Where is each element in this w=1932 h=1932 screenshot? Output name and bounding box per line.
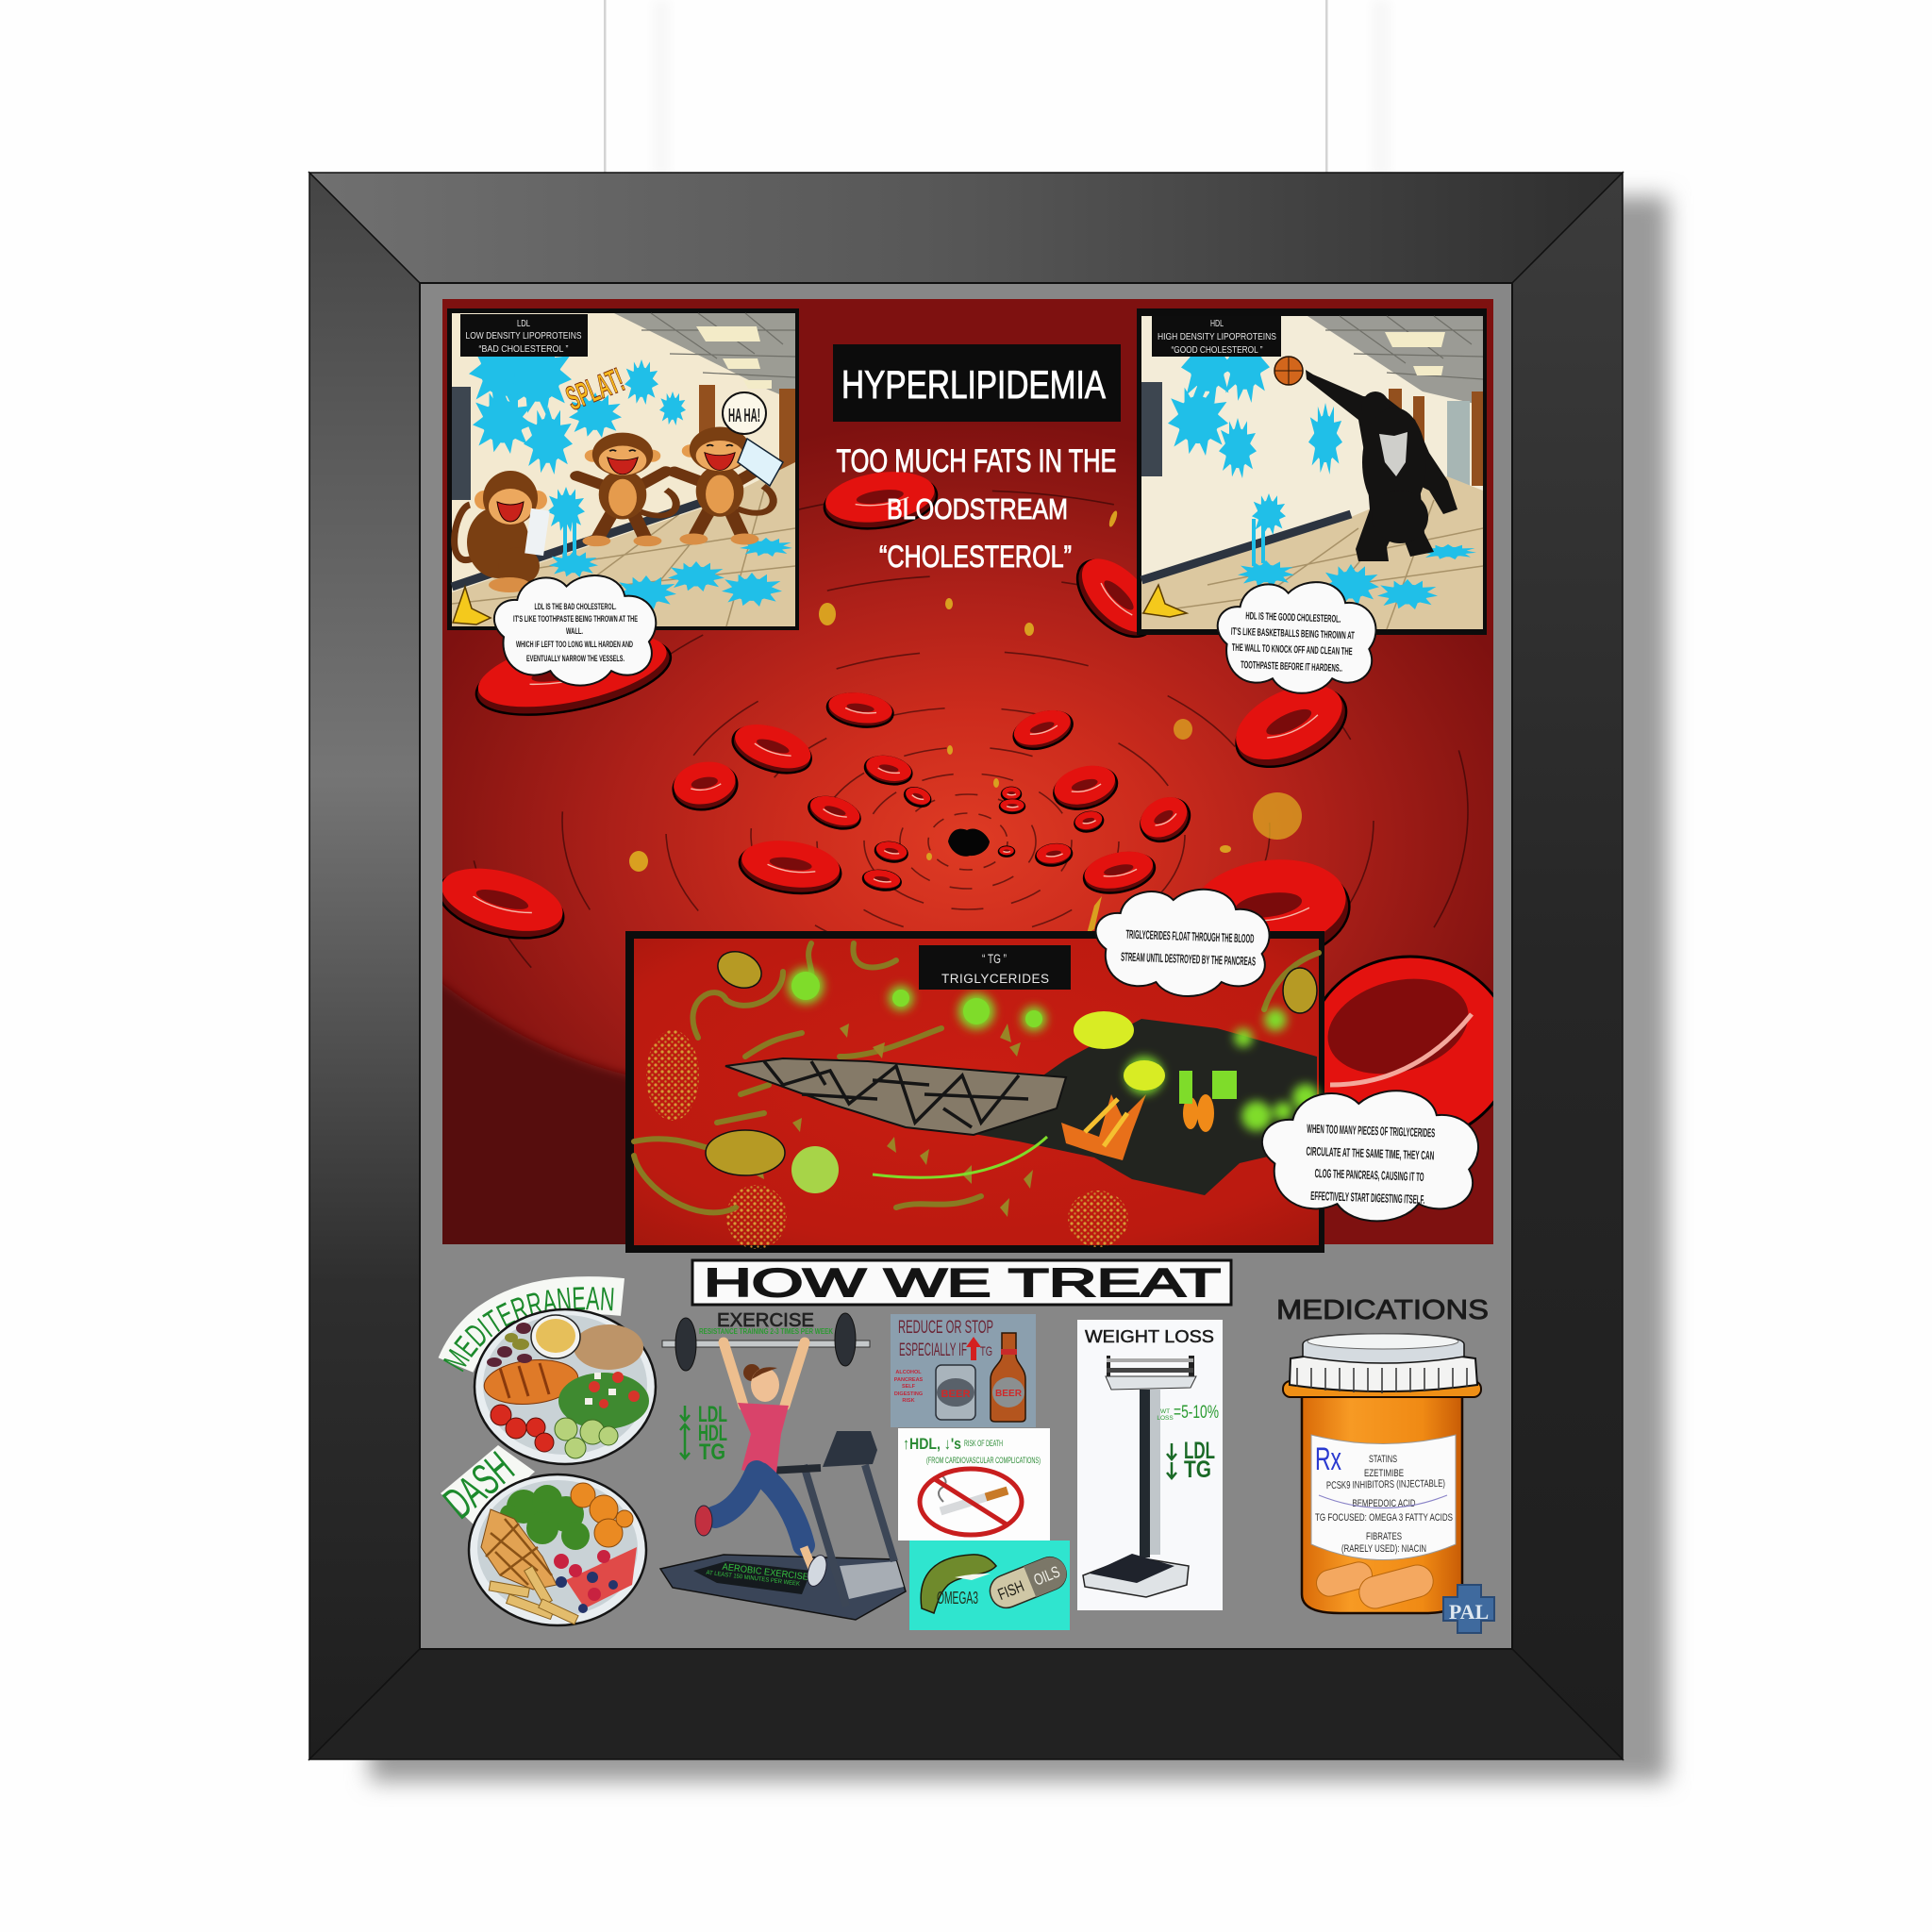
berries and watermelon xyxy=(554,1547,637,1613)
monkey laughing right xyxy=(675,426,774,544)
panel: stop smoking xyxy=(898,1428,1050,1541)
subtitle: BLOODSTREAM xyxy=(887,492,1068,525)
callout: triglycerides float: STREAM UNTIL DESTROYED BY THE PANCREAS xyxy=(1121,950,1256,968)
hallway wall xyxy=(452,313,795,626)
hallway ceiling xyxy=(614,313,795,401)
fish oil capsule: FISH xyxy=(995,1577,1026,1604)
callout: pancreas clog: CIRCULATE AT THE SAME TIME, THEY CAN xyxy=(1306,1144,1435,1162)
LDL TG effect: TG xyxy=(1184,1457,1211,1483)
label: HDL: “GOOD CHOLESTEROL ” xyxy=(1172,344,1263,356)
pill bottle xyxy=(1283,1334,1481,1613)
callout: pancreas clog: CLOG THE PANCREAS, CAUSING IT TO xyxy=(1314,1166,1424,1184)
label: triglycerides xyxy=(919,945,1071,990)
picture frame xyxy=(309,173,1623,1759)
panel: weight loss: WT xyxy=(1160,1408,1170,1415)
banner xyxy=(456,1295,623,1365)
callout: HDL explanation: HDL IS THE GOOD CHOLESTEROL. xyxy=(1245,610,1341,625)
monkey laughing middle xyxy=(577,433,676,546)
panel: weight loss xyxy=(1077,1320,1223,1610)
panel: omega 3 xyxy=(909,1541,1072,1630)
salmon xyxy=(482,1356,580,1408)
floating debris xyxy=(755,1024,1033,1217)
SPLAT sound effect: SPLAT! xyxy=(560,360,629,418)
fish oil capsule: OILS xyxy=(1031,1563,1062,1590)
title box xyxy=(833,344,1121,422)
label: LDL: LOW DENSITY LIPOPROTEINS xyxy=(466,330,581,341)
orange debris patches xyxy=(646,1030,1128,1249)
callout: HDL explanation xyxy=(1218,582,1375,693)
prescription label: STATINS xyxy=(1369,1454,1397,1465)
heading: how we treat: HOW WE TREAT xyxy=(704,1260,1221,1305)
panel: stop smoking: RISK OF DEATH xyxy=(964,1439,1003,1449)
barbell xyxy=(662,1313,870,1371)
no smoking icon xyxy=(920,1469,1022,1535)
prescription label: (RARELY USED): NIACIN xyxy=(1341,1543,1426,1555)
prescription label: TG FOCUSED: OMEGA 3 FATTY ACIDS xyxy=(1315,1512,1453,1524)
callout: LDL explanation: WHICH IF LEFT TOO LONG WILL HARDEN AND xyxy=(516,640,633,650)
heading: medications: MEDICATIONS xyxy=(1276,1295,1489,1325)
panel: HDL gorilla comic xyxy=(1137,308,1487,635)
balance scale xyxy=(1083,1356,1196,1597)
callout: pancreas clog: EFFECTIVELY START DIGESTING ITSELF. xyxy=(1310,1189,1425,1207)
panel: reduce alcohol: PANCREAS xyxy=(894,1377,924,1383)
resistance training note: RESISTANCE TRAINING 2-3 TIMES PER WEEK xyxy=(699,1327,833,1336)
LDL HDL TG effect: TG xyxy=(699,1440,725,1465)
toothpaste splats xyxy=(469,330,792,609)
monkey sitting xyxy=(455,471,550,592)
label: LDL: “BAD CHOLESTEROL ” xyxy=(479,343,569,355)
hallway floor xyxy=(452,462,795,626)
hallway doors xyxy=(699,385,795,483)
toothpaste tube xyxy=(738,439,783,486)
vessel shadow region xyxy=(442,979,625,1244)
beer can: BEER xyxy=(941,1389,971,1400)
banner xyxy=(441,1445,535,1525)
banana peel xyxy=(453,587,491,625)
basketball xyxy=(1274,357,1303,385)
treadmill: AT LEAST 150 MINUTES PER WEEK xyxy=(706,1570,801,1588)
panel: weight loss: LOSS xyxy=(1157,1415,1174,1422)
sweet potato xyxy=(571,1483,633,1547)
hanging strings xyxy=(604,0,1391,175)
panel: reduce alcohol: ESPECIALLY IF xyxy=(899,1341,967,1360)
beer can xyxy=(936,1365,975,1420)
callout: pancreas clog xyxy=(1262,1091,1478,1221)
callout: LDL explanation: LDL IS THE BAD CHOLESTEROL. xyxy=(534,602,617,612)
callout: triglycerides float xyxy=(1096,890,1270,996)
label: HDL: HIGH DENSITY LIPOPROTEINS xyxy=(1158,331,1276,342)
subtitle xyxy=(836,443,1117,574)
treadmill xyxy=(660,1431,906,1620)
panel: reduce alcohol: SELF xyxy=(902,1384,916,1390)
large red blood cell right xyxy=(1324,955,1493,1125)
logo: PAL: PAL xyxy=(1449,1600,1489,1624)
treadmill: AEROBIC EXERCISE xyxy=(722,1562,809,1583)
grains xyxy=(574,1324,643,1370)
LDL HDL TG effect: HDL xyxy=(698,1421,727,1446)
LDL HDL TG effect xyxy=(680,1402,727,1465)
fat globules xyxy=(629,510,1302,934)
label: HDL: HDL xyxy=(1210,318,1224,329)
prescription label: Rx xyxy=(1315,1441,1341,1477)
HA HA speech bubble xyxy=(723,392,766,434)
plate xyxy=(475,1309,656,1464)
callout: HDL explanation: TOOTHPASTE BEFORE IT HARDENS.. xyxy=(1241,659,1342,675)
panel: exercise xyxy=(660,1310,906,1620)
prescription label: EZETIMIBE xyxy=(1364,1468,1404,1479)
panel: stop smoking: ↑HDL, ↓'s xyxy=(903,1435,961,1453)
label: LDL: LDL xyxy=(517,318,530,329)
panel: Mediterranean diet xyxy=(438,1276,657,1466)
pasta xyxy=(489,1566,578,1624)
panel: Mediterranean diet: MEDITERRANEAN xyxy=(443,1287,613,1372)
subtitle: “CHOLESTEROL” xyxy=(879,540,1072,574)
beer bottle xyxy=(991,1333,1025,1422)
hallway ceiling xyxy=(1307,316,1483,406)
HA HA speech bubble: HA HA! xyxy=(728,406,760,426)
prescription label: PCSK9 INHIBITORS (INJECTABLE) xyxy=(1326,1478,1445,1491)
panel: reduce alcohol: RISK xyxy=(902,1398,915,1404)
title box: HYPERLIPIDEMIA xyxy=(841,362,1106,407)
callout: HDL explanation: IT'S LIKE BASKETBALLS BEING THROWN AT xyxy=(1231,626,1355,641)
plate xyxy=(469,1474,646,1625)
panel: blood vessel artwork xyxy=(415,299,1512,1264)
label: HDL xyxy=(1152,316,1281,357)
callout: LDL explanation: EVENTUALLY NARROW THE VESSELS. xyxy=(526,654,625,664)
prescription label: BEMPEDOIC ACID xyxy=(1353,1498,1416,1509)
chicken xyxy=(481,1509,557,1590)
fire xyxy=(1061,1094,1214,1160)
woman running xyxy=(695,1342,830,1589)
far wall and doors xyxy=(1447,401,1470,486)
panel: reduce alcohol: ALCOHOL xyxy=(895,1370,922,1375)
hummus bowl xyxy=(531,1315,580,1358)
vessel wall rings xyxy=(474,491,1469,968)
vessel lumen hole xyxy=(948,828,990,857)
LDL TG effect xyxy=(1167,1438,1215,1483)
LDL TG effect: LDL xyxy=(1184,1438,1215,1464)
subtitle: TOO MUCH FATS IN THE xyxy=(836,443,1117,479)
capsules xyxy=(1313,1559,1437,1612)
tomatoes xyxy=(491,1405,554,1452)
prescription label xyxy=(1311,1435,1456,1560)
callout: LDL explanation: WALL. xyxy=(566,626,583,637)
panel: weight loss: =5-10% xyxy=(1174,1403,1219,1423)
red up arrow xyxy=(966,1337,981,1360)
fish xyxy=(921,1555,996,1613)
panel: DASH diet: DASH xyxy=(435,1443,524,1528)
panel: reduce alcohol: DIGESTING xyxy=(894,1391,923,1397)
olives xyxy=(487,1323,532,1367)
worm-ship hull xyxy=(962,1019,1317,1195)
green energy glows xyxy=(788,968,1319,1193)
salad xyxy=(558,1373,649,1429)
frame drop shadow xyxy=(370,196,1668,1781)
panel: weight loss: WEIGHT LOSS xyxy=(1085,1327,1214,1346)
toothpaste splats xyxy=(1168,321,1476,609)
callout: LDL explanation xyxy=(494,575,656,686)
label: triglycerides: TRIGLYCERIDES xyxy=(941,972,1049,986)
exercise heading: EXERCISE xyxy=(717,1310,814,1331)
red blood cells xyxy=(431,465,1358,974)
label: LDL xyxy=(460,314,588,357)
grey poster mat xyxy=(420,283,1512,1649)
tendrils xyxy=(634,943,1319,1212)
callout: HDL explanation: THE WALL TO KNOCK OFF AND CLEAN THE xyxy=(1232,642,1353,658)
heading: how we treat xyxy=(692,1260,1231,1305)
yellow pods xyxy=(706,945,1317,1175)
LDL HDL TG effect: LDL xyxy=(698,1402,727,1427)
logo: PAL xyxy=(1443,1585,1494,1633)
callout: triglycerides float: TRIGLYCERIDES FLOAT THROUGH THE BLOOD xyxy=(1125,927,1255,945)
panel: triglycerides battle scene xyxy=(625,931,1324,1253)
gorilla xyxy=(1306,370,1457,561)
broccoli xyxy=(500,1485,590,1550)
panel: reduce alcohol xyxy=(891,1314,1036,1427)
panel: reduce alcohol: TG xyxy=(980,1343,992,1358)
hallway floor xyxy=(1141,476,1483,629)
panel: stop smoking: (FROM CARDIOVASCULAR COMPLICATIONS) xyxy=(926,1456,1041,1466)
hallway wall xyxy=(1141,316,1483,629)
panel: DASH diet xyxy=(435,1443,646,1625)
beer bottle: BEER xyxy=(995,1389,1023,1399)
panel: LDL monkeys comic xyxy=(447,308,799,630)
callout: pancreas clog: WHEN TOO MANY PIECES OF TRIGLYCERIDES xyxy=(1307,1122,1436,1140)
panel: reduce alcohol: REDUCE OR STOP xyxy=(898,1318,993,1338)
cucumbers xyxy=(555,1418,618,1458)
banana peel xyxy=(1143,585,1187,617)
worm-ship rock nose xyxy=(725,1058,1066,1135)
fish oil capsule xyxy=(985,1552,1072,1612)
callout: LDL explanation: IT'S LIKE TOOTHPASTE BEING THROWN AT THE xyxy=(513,614,638,625)
prescription label: FIBRATES xyxy=(1366,1531,1402,1542)
label: triglycerides: “ TG ” xyxy=(982,952,1007,966)
panel: omega 3: OMEGA3 xyxy=(937,1589,978,1607)
